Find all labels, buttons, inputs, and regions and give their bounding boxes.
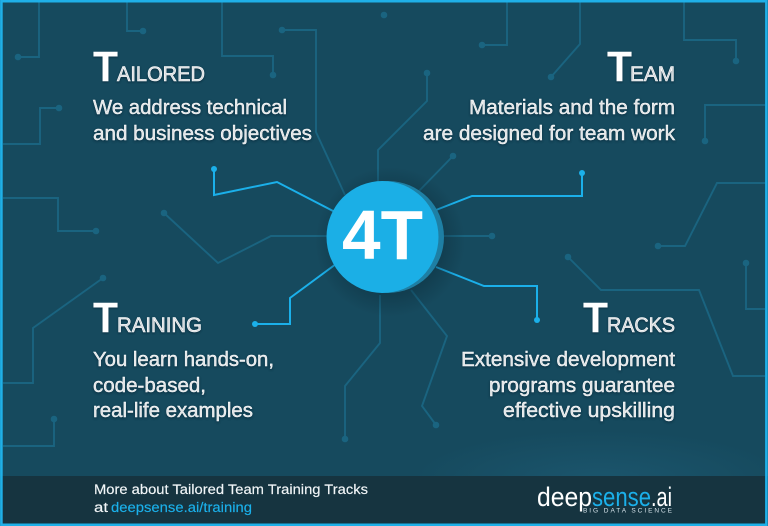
section: Tailored [93,43,312,145]
connector: Tracks [436,267,540,323]
section: Tailored: We address technical [93,97,287,119]
section: Team: T [607,43,632,91]
section: Team: Materials and the form [469,97,675,119]
section: Tracks: effective upskilling [503,400,675,422]
section: Training: real-life examples [93,400,253,422]
section: Tracks: RACKS [607,314,675,337]
section: Tracks: T [583,294,608,342]
logo: deepsense.ai: .ai [651,482,672,512]
connector: Tailored [211,166,335,212]
section: Team: EAM [630,63,675,86]
logo: deepsense.ai: deep [537,482,592,512]
section: Team: are designed for team work [423,123,676,145]
logo: deepsense.ai: sense [592,482,651,512]
section: Tailored: AILORED [117,63,205,86]
section: Training [93,294,274,422]
logo: deepsense.ai [537,482,673,514]
section: Training: T [93,294,118,342]
footer text: deepsense.ai/training [111,500,252,515]
section: Team [423,43,676,145]
section: Tracks: programs guarantee [489,375,675,397]
section: Training: code-based, [93,375,206,397]
section: Training: RAINING [117,314,202,337]
footer text [94,482,368,515]
section: Tailored: T [93,43,118,91]
section: Tailored: and business objectives [93,123,312,145]
central 4T badge [315,167,465,317]
section: Tracks: Extensive development [461,349,675,371]
connector: Training [252,264,336,327]
connector: Team [436,170,585,210]
footer band [0,476,768,524]
footer text: More about Tailored Team Training Tracks [94,482,368,497]
section: Tracks [461,294,675,422]
footer text: at [94,500,108,515]
central 4T badge: 4T [342,196,423,274]
section: Training: You learn hands-on, [93,349,274,371]
logo: deepsense.ai: BIG DATA SCIENCE [583,508,673,514]
